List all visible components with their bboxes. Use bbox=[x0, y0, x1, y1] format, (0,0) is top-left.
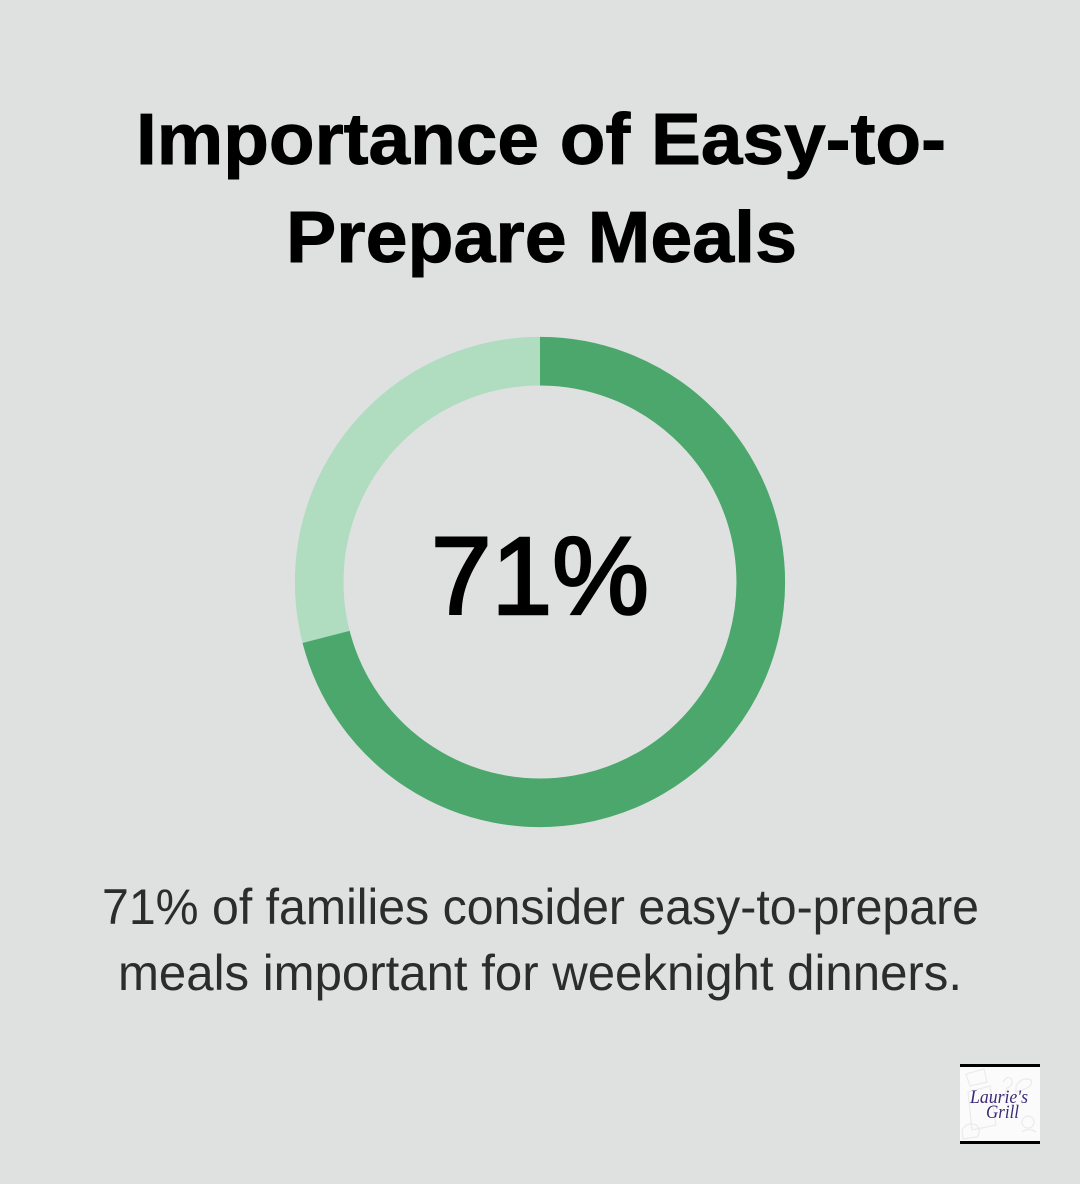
donut 71% segment bbox=[326, 361, 761, 803]
logo: Laurie's Grill: Grill bbox=[986, 1102, 1019, 1123]
donut chart: 71% bbox=[319, 361, 761, 803]
donut remainder segment bbox=[319, 361, 761, 803]
title: Importance of Easy-to- bbox=[136, 100, 946, 180]
center value: 71% bbox=[431, 515, 649, 638]
title bbox=[136, 100, 946, 278]
logo: Laurie's Grill bbox=[960, 1064, 1040, 1144]
logo: Laurie's Grill: Laurie's bbox=[969, 1087, 1028, 1108]
title: Prepare Meals bbox=[286, 198, 797, 278]
description text: 71% of families consider easy-to-prepare bbox=[102, 879, 979, 935]
description text: meals important for weeknight dinners. bbox=[118, 945, 962, 1001]
description text bbox=[102, 879, 979, 1001]
